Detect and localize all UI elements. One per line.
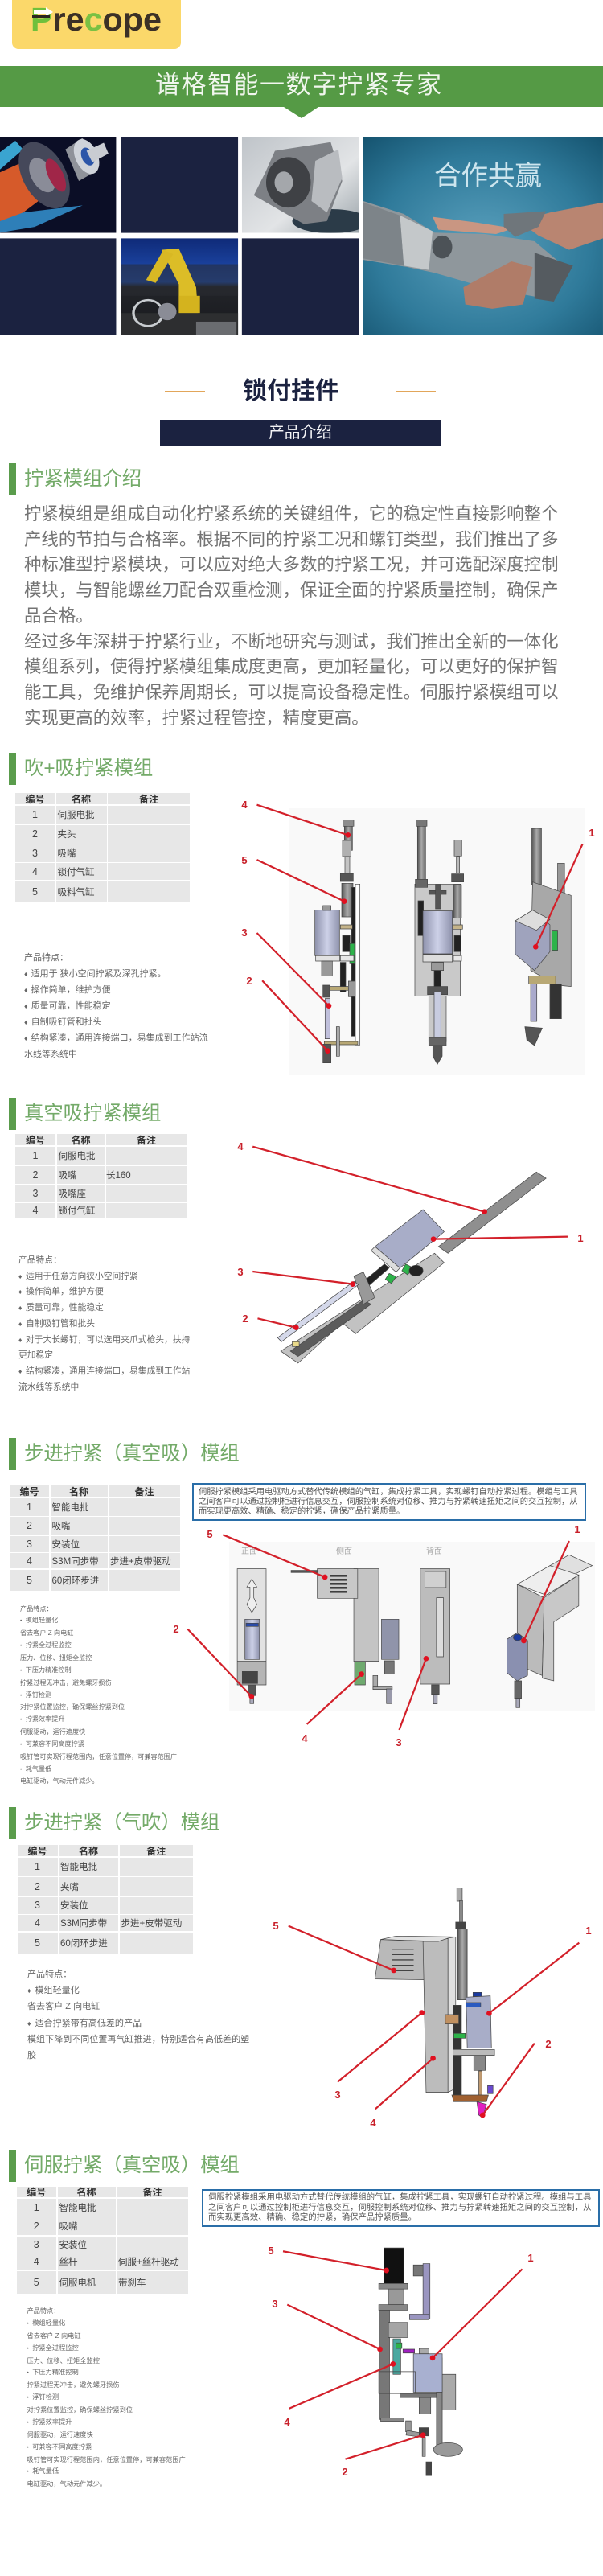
product features: • xyxy=(27,2370,29,2376)
description callout: 而实现更高效、精确、稳定的拧紧，确保产品拧紧质量。 xyxy=(199,1507,404,1516)
product features xyxy=(20,1605,177,1785)
photo caption: 合作共赢 xyxy=(434,162,542,191)
parts table: 安装位 xyxy=(51,1539,80,1549)
product features: 模组轻量化 xyxy=(26,1617,58,1624)
callout numbers: 3 xyxy=(334,2089,341,2101)
subtitle bar: 产品介绍 xyxy=(269,424,332,442)
parts table: 伺服电机 xyxy=(59,2278,96,2287)
callout numbers: 5 xyxy=(273,1920,279,1932)
intro paragraph: 种标准型拧紧模块，可以应对绝大多数的拧紧工况，并可选配深度控制 xyxy=(24,555,559,574)
product features: 吸钉管可实现行程范围内，任意位置停，可兼容范围广 xyxy=(27,2456,186,2463)
parts table: 智能电批 xyxy=(60,1863,97,1872)
diagram: diagonal module with callouts xyxy=(237,1140,584,1364)
banner xyxy=(0,66,603,118)
description callout: 伺服拧紧模组采用电驱动方式替代传统模组的气缸，集成拧紧工具，实现螺钉自动拧紧过程。模组与工具 xyxy=(208,2193,592,2202)
panel: blow and suction module xyxy=(9,753,595,1065)
parts table: 夹头 xyxy=(58,830,76,840)
product features: 拧紧效率提升 xyxy=(32,2418,72,2426)
tile: navy xyxy=(0,238,116,335)
callout numbers: 2 xyxy=(242,1313,248,1325)
heading: stepper air blow xyxy=(9,1807,219,1839)
product features: 水线等系统中 xyxy=(24,1050,77,1059)
parts table xyxy=(15,1134,187,1218)
callout numbers: 4 xyxy=(370,2117,376,2129)
parts table: 1 xyxy=(27,1501,32,1512)
description callout: 之间客户可以通过控制柜进行信息交互，伺服控制系统对位移、推力与拧紧转速扭矩之间的交互控制，从 xyxy=(208,2204,592,2212)
product features: 浮钉检测 xyxy=(26,1691,51,1699)
product features: ♦ xyxy=(18,1367,22,1375)
panel: servo vacuum module xyxy=(9,2150,600,2488)
product features: ♦ xyxy=(24,970,27,978)
product features: 电缸驱动，气动元件减少。 xyxy=(27,2480,106,2488)
heading: blow and suction xyxy=(9,753,153,785)
parts table: 3 xyxy=(35,1900,40,1911)
callout numbers: 5 xyxy=(207,1528,213,1540)
callout numbers: 2 xyxy=(246,975,252,987)
product features: 质量可靠，性能稳定 xyxy=(26,1303,104,1313)
view captions: 正面 xyxy=(241,1547,257,1556)
parts table: 3 xyxy=(32,848,38,859)
parts table: 4 xyxy=(27,1555,32,1567)
heading: servo vacuum xyxy=(9,2150,240,2182)
parts table: 2 xyxy=(35,1880,40,1892)
product features: ♦ xyxy=(24,1018,27,1026)
parts table: 1 xyxy=(32,809,38,820)
heading: vacuum suction: 真空吸拧紧模组 xyxy=(24,1103,161,1124)
product features: ♦ xyxy=(18,1320,22,1328)
parts table xyxy=(10,1485,180,1591)
parts table: 1 xyxy=(34,2202,39,2213)
parts table: 带刹车 xyxy=(118,2278,146,2287)
module views xyxy=(237,1555,593,1707)
intro paragraph: 经过多年深耕于拧紧行业，不断地研究与测试，我们推出全新的一体化 xyxy=(24,632,559,651)
intro paragraph: 拧紧模组是组成自动化拧紧系统的关键组件，它的稳定性直接影响整个 xyxy=(24,504,559,524)
product features: 产品特点： xyxy=(24,953,68,963)
image: motor cutaway xyxy=(0,137,116,233)
product features: 结构紧凑，通用连接端口，易集成到工作站流 xyxy=(31,1033,208,1043)
heading: vacuum suction xyxy=(9,1098,161,1130)
parts table: 吸嘴 xyxy=(51,1522,71,1531)
parts table: 2 xyxy=(34,2221,39,2232)
logo xyxy=(12,0,181,49)
product features: 产品特点： xyxy=(27,2307,60,2315)
callout numbers xyxy=(273,1920,592,2129)
heading: stepper air blow: 步进拧紧（气吹）模组 xyxy=(24,1812,219,1834)
product features: 对于大长螺钉，可以选用夹爪式枪头，扶持 xyxy=(26,1335,190,1345)
product features: 模组轻量化 xyxy=(32,2319,65,2327)
callout numbers: 1 xyxy=(589,827,595,839)
product features: 自制吸钉管和批头 xyxy=(31,1017,102,1027)
parts table: S3M同步带 xyxy=(51,1557,99,1567)
logo: Precope xyxy=(31,1,162,38)
product features: 拧紧全过程监控 xyxy=(26,1641,72,1649)
image: gearbox xyxy=(242,137,369,233)
callout numbers: 4 xyxy=(241,799,248,811)
product features: • xyxy=(27,2445,29,2451)
parts table: 5 xyxy=(32,886,38,898)
callout numbers: 1 xyxy=(577,1232,584,1244)
product features: ♦ xyxy=(24,1034,27,1042)
product features: 产品特点： xyxy=(27,1970,72,1979)
parts table: S3M同步带 xyxy=(60,1919,107,1929)
product features: 电缸驱动，气动元件减少。 xyxy=(20,1777,99,1785)
banner: 谱格智能一数字拧紧专家 xyxy=(155,71,442,99)
module body xyxy=(277,1172,546,1363)
product features: • xyxy=(27,2469,29,2475)
description callout: 伺服拧紧模组采用电驱动方式替代传统模组的气缸，集成拧紧工具，实现螺钉自动拧紧过程。模组与工具 xyxy=(199,1488,578,1497)
product features: 省去客户 Z 向电缸 xyxy=(20,1629,73,1637)
parts table: 4 xyxy=(35,1917,40,1929)
parts table: 智能电批 xyxy=(51,1502,88,1512)
parts table: 步进+皮带驱动 xyxy=(121,1919,182,1929)
parts table: 锁付气缸 xyxy=(58,867,95,877)
callout numbers xyxy=(173,1523,580,1748)
parts table: 丝杆 xyxy=(59,2258,77,2267)
view captions: 侧面 xyxy=(336,1546,352,1556)
heading: stepper vacuum xyxy=(9,1438,240,1470)
product features: • xyxy=(20,1643,22,1649)
parts table: 3 xyxy=(34,2239,39,2250)
tile: navy xyxy=(242,238,359,335)
image: yellow robot xyxy=(121,238,238,335)
heading: servo vacuum: 伺服拧紧（真空吸）模组 xyxy=(24,2155,240,2176)
product features: 模组下降到不同位置再气缸推进，特别适合有高低差的塑 xyxy=(27,2035,249,2044)
product features: • xyxy=(20,1717,22,1723)
panel: vacuum suction module xyxy=(9,1098,584,1392)
product features: ♦ xyxy=(18,1336,22,1344)
callout numbers: 4 xyxy=(284,2416,290,2428)
product features: • xyxy=(27,2420,29,2426)
product features: ♦ xyxy=(27,1986,31,1995)
parts table: 吸料气缸 xyxy=(58,888,95,898)
product features: 省去客户 Z 向电缸 xyxy=(27,2332,81,2340)
product features: 质量可靠，性能稳定 xyxy=(31,1001,111,1011)
intro paragraph: 模块，与智能螺丝刀配合双重检测，保证全面的拧紧质量控制，确保产 xyxy=(24,581,559,600)
product features: 下压力精准控制 xyxy=(26,1666,72,1674)
product features: ♦ xyxy=(24,986,27,994)
parts table: 夹嘴 xyxy=(60,1882,79,1892)
product features: 拧紧过程无冲击，避免螺牙损伤 xyxy=(20,1679,112,1687)
parts table: 吸嘴座 xyxy=(58,1189,86,1199)
product features: 伺服驱动，运行速度快 xyxy=(20,1728,85,1736)
product features: 压力、位移、扭矩全监控 xyxy=(27,2356,100,2364)
view captions xyxy=(241,1546,442,1556)
callout numbers: 5 xyxy=(241,854,248,866)
product features: 适用于任意方向狭小空间拧紧 xyxy=(26,1272,138,1281)
product features: 浮钉检测 xyxy=(32,2393,59,2401)
parts table: 吸嘴 xyxy=(58,1171,77,1181)
product features: 产品特点： xyxy=(20,1605,53,1613)
intro paragraph xyxy=(24,504,559,728)
parts table: 5 xyxy=(35,1937,40,1949)
product features: 可兼容不同高度拧紧 xyxy=(26,1740,84,1748)
product features: 下压力精准控制 xyxy=(32,2369,79,2376)
product features: 产品特点： xyxy=(18,1255,62,1265)
product features: • xyxy=(20,1668,22,1674)
diagram: module with callouts xyxy=(273,1888,592,2129)
product features xyxy=(18,1255,190,1392)
product features: 拧紧全过程监控 xyxy=(32,2344,79,2352)
view captions: 背面 xyxy=(426,1546,442,1556)
product features: 适用于 狭小空间拧紧及深孔拧紧。 xyxy=(31,969,166,979)
product features: 自制吸钉管和批头 xyxy=(26,1319,95,1329)
subtitle bar xyxy=(160,420,441,446)
parts table: 伺服电批 xyxy=(58,811,95,820)
product features: 伺服驱动，运行速度快 xyxy=(27,2431,93,2438)
product features: 模组轻量化 xyxy=(35,1986,80,1995)
parts table: 吸嘴 xyxy=(58,849,76,859)
diagram: four views with callouts xyxy=(173,1523,593,1748)
parts table: 吸嘴 xyxy=(59,2222,77,2232)
intro paragraph: 能工具，免维护保养周期长，可以提高设备稳定性。伺服拧紧模组可以 xyxy=(24,683,559,702)
parts table: 1 xyxy=(33,1150,38,1161)
product features: • xyxy=(20,1767,22,1773)
product features xyxy=(24,952,208,1059)
product features: 压力、位移、扭矩全监控 xyxy=(20,1654,92,1662)
product features: • xyxy=(27,2395,29,2401)
parts table: 5 xyxy=(34,2276,39,2287)
description callout: 之间客户可以通过控制柜进行信息交互，伺服控制系统对位移、推力与拧紧转速扭矩之间的交互控制，从 xyxy=(199,1498,578,1506)
image collage xyxy=(0,137,603,335)
parts table: 3 xyxy=(27,1538,32,1549)
parts table: 锁付气缸 xyxy=(58,1206,95,1216)
callout numbers: 1 xyxy=(527,2252,534,2264)
panel: intro xyxy=(9,463,559,728)
product features: • xyxy=(20,1742,22,1748)
parts table: 1 xyxy=(35,1861,40,1872)
product features: ♦ xyxy=(18,1288,22,1296)
description callout xyxy=(202,2189,600,2227)
product features xyxy=(27,1969,249,2060)
product features: • xyxy=(20,1618,22,1624)
parts table: 安装位 xyxy=(60,1901,88,1911)
callout numbers: 1 xyxy=(574,1523,580,1535)
intro paragraph: 实现更高的效率，拧紧过程管控，精度更高。 xyxy=(24,709,369,728)
product features: 流水线等系统中 xyxy=(18,1382,79,1392)
product features: 适合拧紧带有高低差的产品 xyxy=(35,2019,142,2028)
product features: 耗气量低 xyxy=(32,2467,59,2475)
product features: 耗气量低 xyxy=(26,1765,51,1773)
callout numbers xyxy=(241,799,595,987)
heading: intro xyxy=(9,463,142,495)
product features: • xyxy=(27,2321,29,2327)
module isometric view and leader lines xyxy=(257,805,583,1054)
product features: 更加稳定 xyxy=(18,1350,53,1360)
parts table xyxy=(16,2187,188,2294)
parts table: 伺服+丝杆驱动 xyxy=(118,2258,179,2267)
image: handshake xyxy=(363,137,603,335)
product features: 操作简单，维护方便 xyxy=(31,985,111,995)
callout numbers: 2 xyxy=(545,2038,552,2050)
panel: stepper vacuum module xyxy=(9,1438,593,1785)
title: 锁付挂件 xyxy=(243,378,339,405)
parts table: 安装位 xyxy=(59,2241,87,2250)
parts table: 长160 xyxy=(106,1171,131,1181)
product features: 拧紧过程无冲击，避免螺牙损伤 xyxy=(27,2381,120,2389)
heading: blow and suction: 吹+吸拧紧模组 xyxy=(24,758,153,779)
product features: 省去客户 Z 向电缸 xyxy=(27,2002,100,2011)
parts table: 2 xyxy=(32,828,38,840)
product features: ♦ xyxy=(24,1002,27,1010)
product features: 胶 xyxy=(27,2051,36,2060)
parts table: 4 xyxy=(33,1205,38,1216)
callout numbers: 2 xyxy=(342,2466,348,2478)
panel: stepper air blow module xyxy=(9,1807,592,2129)
callout numbers: 1 xyxy=(585,1925,592,1937)
parts table: 步进+皮带驱动 xyxy=(110,1557,171,1567)
parts table xyxy=(18,1845,193,1954)
module body xyxy=(379,2248,462,2475)
product features: 结构紧凑，通用连接端口，易集成到工作站 xyxy=(26,1366,190,1376)
parts table: 3 xyxy=(33,1188,38,1199)
callout numbers: 2 xyxy=(173,1623,179,1635)
product features: ♦ xyxy=(18,1304,22,1312)
parts table xyxy=(15,793,190,902)
callout numbers: 4 xyxy=(302,1732,308,1744)
heading: stepper vacuum: 步进拧紧（真空吸）模组 xyxy=(24,1443,240,1465)
callout numbers: 3 xyxy=(241,926,248,939)
callout numbers: 4 xyxy=(237,1140,244,1152)
parts table: 5 xyxy=(27,1575,32,1586)
module side and front views xyxy=(315,820,464,1064)
product features: 对拧紧位置监控，确保螺丝拧紧到位 xyxy=(20,1703,125,1711)
product features: 对拧紧位置监控，确保螺丝拧紧到位 xyxy=(27,2406,133,2414)
diagram: module with callouts xyxy=(268,2245,534,2478)
callout numbers xyxy=(268,2245,534,2478)
parts table: 伺服电批 xyxy=(58,1152,95,1161)
product features: • xyxy=(20,1692,22,1699)
heading: intro: 拧紧模组介绍 xyxy=(24,468,142,490)
callout numbers: 3 xyxy=(272,2298,278,2310)
description callout: 而实现更高效、精确、稳定的拧紧，确保产品拧紧质量。 xyxy=(208,2213,416,2222)
parts table: 智能电批 xyxy=(59,2204,96,2213)
product features: 可兼容不同高度拧紧 xyxy=(32,2443,92,2451)
parts table: 4 xyxy=(32,865,38,877)
product features: 操作简单，维护方便 xyxy=(26,1287,104,1296)
parts table: 60闭环步进 xyxy=(51,1576,99,1586)
module body xyxy=(375,1888,494,2118)
product features: ♦ xyxy=(18,1272,22,1280)
callout numbers xyxy=(237,1140,584,1325)
product features: 拧紧效率提升 xyxy=(26,1715,64,1723)
tile: navy xyxy=(121,137,238,233)
diagram: three views with callouts xyxy=(241,799,595,1065)
parts table: 2 xyxy=(33,1169,38,1181)
product features: 吸钉管可实现行程范围内，任意位置停，可兼容范围广 xyxy=(20,1753,177,1760)
callout numbers: 5 xyxy=(268,2245,274,2257)
product features: • xyxy=(27,2346,29,2352)
product features: ♦ xyxy=(27,2019,31,2028)
intro paragraph: 产线的节拍与合格率。根据不同的拧紧工况和螺钉类型，我们推出了多 xyxy=(24,530,559,549)
product features xyxy=(27,2307,186,2488)
parts table: 2 xyxy=(27,1520,32,1531)
parts table: 4 xyxy=(34,2256,39,2267)
callout numbers: 3 xyxy=(237,1266,244,1278)
intro paragraph: 品合格。 xyxy=(24,606,93,626)
parts table: 60闭环步进 xyxy=(60,1939,108,1949)
intro paragraph: 模组系列，使得拧紧模组集成度更高，更加轻量化，可以更好的保护智 xyxy=(24,657,559,676)
description callout xyxy=(192,1483,586,1521)
callout numbers: 3 xyxy=(396,1736,402,1748)
